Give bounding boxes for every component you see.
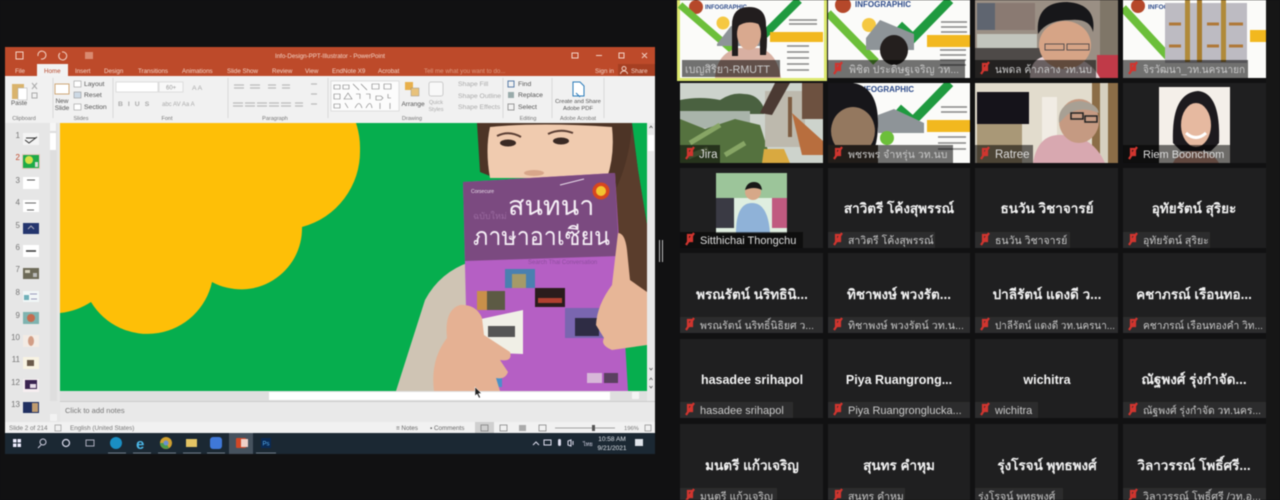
- participant tile: พิชิต: [827, 0, 971, 79]
- ribbon commands: Shape Fill: [458, 81, 489, 88]
- ribbon commands: [5, 76, 655, 123]
- name label: [680, 145, 720, 163]
- ribbon commands: Layout: [84, 81, 105, 88]
- name label: [828, 488, 905, 500]
- icon: task view: [86, 440, 94, 446]
- system tray: ไทย: [582, 441, 593, 448]
- slide heading: INFOGRAPHIC: [858, 85, 914, 94]
- purple book: [463, 173, 628, 391]
- big name: hasadee srihapol: [701, 373, 803, 387]
- name label: เบญสิริยา-RMUTT: [685, 64, 770, 76]
- big name: Piya Ruangrong...: [846, 373, 952, 387]
- name label: [1123, 317, 1266, 333]
- name label: ธนวัน วิชาจารย์: [995, 234, 1067, 247]
- graduation gowns: [1165, 0, 1247, 63]
- status bar: Slide 2 of 214: [9, 425, 48, 432]
- ribbon tabs: Tell me what you want to do...: [424, 68, 506, 75]
- purple book: ฉบับใหม่: [473, 211, 507, 221]
- name label: ณัฐพงศ์ รุ่งกำจัด วท.นคร...: [1143, 404, 1261, 417]
- participant tile: สุนทร: [828, 424, 970, 500]
- slide thumbnail panel: 3: [16, 176, 21, 185]
- title bar: Info-Design-PPT-Illustrator - PowerPoint: [275, 53, 385, 60]
- name label: [680, 232, 803, 248]
- participant tile: hasadee: [680, 339, 823, 418]
- participant tile: อุทัยรัตน์: [1123, 168, 1266, 248]
- purple book: Corsecure: [471, 189, 494, 195]
- icon: chrome: [160, 437, 172, 449]
- icon: windows logo: [13, 439, 21, 447]
- name label: Piya Ruangronglucka...: [848, 405, 962, 417]
- name label: Ratree: [995, 149, 1030, 161]
- name label: [975, 317, 1118, 333]
- icon: search: [38, 439, 46, 448]
- status bar: English (United States): [70, 425, 134, 432]
- participant tile: Riem Boonchom: [1123, 83, 1266, 164]
- system tray: 10:58 AM: [598, 436, 626, 443]
- icon: powerpoint: [229, 433, 253, 454]
- name label: คชาภรณ์ เรือนทองคำ วิท...: [1143, 319, 1263, 332]
- ribbon commands: Editing: [520, 116, 536, 122]
- name label: [828, 317, 970, 333]
- name label: [828, 402, 970, 418]
- ribbon tabs: Acrobat: [378, 68, 400, 75]
- status bar: 196%: [624, 426, 639, 432]
- ribbon commands: Arrange: [401, 101, 425, 108]
- big name: รุ่งโรจน์ พุทธพงศ์: [997, 456, 1097, 474]
- ribbon tabs: [5, 64, 655, 76]
- name label: Jira: [699, 149, 718, 161]
- ribbon tabs: Animations: [182, 68, 213, 75]
- name label: Sitthichai Thongchu: [700, 235, 796, 247]
- big name: มนตรี แก้วเจริญ: [705, 458, 799, 474]
- woman holding book: [396, 123, 647, 391]
- mouse cursor: [475, 387, 482, 398]
- ribbon commands: Slides: [74, 116, 89, 122]
- icon: zoom: [210, 437, 222, 449]
- icon: cortana: [62, 440, 70, 446]
- windows taskbar: [5, 433, 655, 454]
- ribbon commands: Find: [518, 81, 531, 88]
- participant tile: speaker: [676, 0, 828, 82]
- ribbon commands: New: [55, 98, 69, 105]
- big name: ปาลีรัตน์ แดงดี ว...: [993, 286, 1101, 302]
- participant tile: สาวิตรี: [828, 168, 970, 248]
- ribbon commands: A A: [192, 85, 203, 92]
- system tray: [533, 436, 643, 452]
- icon: internet explorer: e: [136, 436, 144, 453]
- slide thumbnail panel: 13: [11, 400, 21, 409]
- big name: คชาภรณ์ เรือนทอ...: [1136, 286, 1252, 302]
- big name: พรณรัตน์ นริทธินิ...: [696, 286, 808, 302]
- name label: [1123, 402, 1266, 418]
- ribbon commands: Section: [84, 104, 107, 111]
- participant tile: มนตรี: [680, 424, 823, 500]
- title bar: [5, 47, 655, 64]
- ribbon commands: Reset: [84, 92, 102, 99]
- name label: hasadee srihapol: [700, 405, 784, 417]
- slide thumbnail panel: 7: [16, 265, 21, 274]
- status bar: ▪ Comments: [430, 425, 464, 432]
- name label: ปาลีรัตน์ แดงดี วท.นครนา...: [995, 319, 1115, 332]
- panel: shared PowerPoint window: [5, 47, 655, 454]
- horizontal scrollbar: [60, 391, 647, 401]
- profile photo: [716, 173, 787, 233]
- name label: [975, 145, 1033, 163]
- name label: [680, 488, 777, 500]
- ribbon tabs: Slide Show: [227, 68, 258, 75]
- status bar: ≡ Notes: [396, 425, 418, 432]
- name label: [1123, 60, 1248, 78]
- participant tile: พชรพร: [828, 82, 971, 164]
- big name: ธนวัน วิชาจารย์: [1000, 200, 1094, 216]
- name label: [1123, 145, 1230, 163]
- ribbon commands: Adobe PDF: [563, 106, 593, 112]
- hands: [433, 305, 511, 391]
- older woman with glasses: [1033, 99, 1105, 163]
- slide thumbnail panel: 10: [11, 333, 21, 342]
- slide thumbnail panel: 6: [16, 243, 21, 252]
- ribbon commands: Shape Effects: [458, 104, 501, 111]
- name label: [975, 60, 1096, 78]
- status bar: [5, 422, 655, 433]
- participant tile: รุ่งโรจน์: [975, 424, 1118, 500]
- icon: photoshop: Ps: [262, 442, 270, 448]
- ribbon commands: Clipboard: [12, 116, 36, 122]
- big name: สาวิตรี โค้งสุพรรณ์: [844, 199, 955, 217]
- participant tile: คชาภรณ์: [1123, 253, 1266, 333]
- participant tile: ณัฐพงศ์: [1123, 339, 1266, 418]
- ribbon commands: Drawing: [402, 116, 422, 122]
- participant tile: ทิชาพงษ์: [828, 253, 970, 333]
- ribbon tabs: EndNote X9: [332, 68, 366, 75]
- woman presenter: [715, 7, 781, 78]
- name label: [1123, 488, 1266, 500]
- green slide background: [60, 123, 647, 391]
- name label: [828, 232, 935, 248]
- woman close-up: [828, 83, 878, 163]
- right edge scrollbar: [647, 123, 655, 401]
- slide thumbnail panel: 12: [11, 378, 21, 387]
- name label: [1123, 232, 1210, 248]
- ribbon tabs: Transitions: [138, 68, 168, 75]
- participant tile: นพดล: [974, 0, 1119, 79]
- slide thumbnail panel: 9: [16, 311, 21, 320]
- participant tile: Ratree: [974, 82, 1119, 164]
- slide thumbnail panel: 1: [16, 131, 21, 140]
- ribbon commands: Styles: [429, 107, 444, 113]
- ribbon commands: BIUS: [118, 101, 154, 108]
- name label: พชรพร จำหรุ่น วท.นบ: [848, 149, 947, 161]
- name label: [680, 317, 823, 333]
- participant tile: Sitthichai: [680, 168, 823, 248]
- yellow scalloped shape: [60, 123, 360, 334]
- icon: photoshop: [261, 438, 271, 448]
- participant tile: พรณรัตน์: [680, 253, 823, 333]
- participant tile: ปาลีรัตน์: [975, 253, 1118, 333]
- ribbon tabs: Share: [631, 68, 648, 75]
- icon: edge: [110, 437, 122, 449]
- big name: ณัฐพงศ์ รุ่งกำจัด...: [1141, 371, 1247, 389]
- participant tile: วิลาวรรณ์: [1123, 424, 1266, 500]
- system tray: 9/21/2021: [598, 445, 627, 452]
- name label: Riem Boonchom: [1143, 149, 1224, 161]
- ribbon commands: Paragraph: [262, 116, 288, 122]
- ribbon commands: Paste: [11, 100, 28, 107]
- name label: ทิชาพงษ์ พวงรัตน์ วท.น...: [848, 319, 964, 332]
- slide heading: INFOGRAPHIC: [1148, 4, 1194, 11]
- gallery divider handle: [660, 240, 662, 262]
- participant tile: wichitra: [975, 339, 1118, 418]
- big name: วิลาวรรณ์ โพธิ์ศรี...: [1137, 455, 1251, 473]
- slide thumbnail panel: 8: [16, 288, 21, 297]
- notes pane: [60, 401, 655, 422]
- name label: พรณรัตน์ นริทธิ์นิธิยศ ว...: [700, 317, 814, 332]
- slide thumbnail panel: 5: [16, 221, 21, 230]
- name label: [975, 402, 1038, 418]
- name label: [828, 145, 953, 163]
- ribbon commands: 60+: [166, 86, 177, 92]
- slide canvas: [59, 122, 648, 392]
- ribbon commands: Replace: [518, 92, 543, 99]
- book subtitle: ภาษาอาเซียน: [473, 223, 610, 251]
- big name: อุทัยรัตน์ สุริยะ: [1152, 200, 1236, 217]
- ribbon tabs: View: [305, 68, 319, 75]
- ribbon commands: Font: [161, 116, 173, 122]
- ribbon commands: Slide: [55, 105, 70, 112]
- ribbon tabs: Sign in: [595, 68, 614, 75]
- slide thumbnail panel: 2: [16, 153, 21, 162]
- slide heading: INFOGRAPHIC: [705, 5, 748, 11]
- name label: พิชิต ประดิษฐเจริญ วท...: [849, 64, 959, 76]
- ribbon commands: Select: [518, 104, 537, 111]
- barcode sticker: [467, 310, 523, 354]
- ribbon commands: Adobe Acrobat: [560, 116, 597, 122]
- ribbon commands: Quick: [429, 100, 443, 106]
- ribbon tabs: Insert: [75, 68, 91, 75]
- name label: อุทัยรัตน์ สุริยะ: [1143, 234, 1209, 247]
- name label: wichitra: [994, 405, 1033, 417]
- participant tile: Piya: [828, 339, 970, 418]
- slide thumbnail panel: 11: [12, 355, 21, 364]
- ribbon tabs: Design: [104, 68, 124, 75]
- name label: จิรวัฒนา_วท.นครนายก: [1143, 64, 1245, 76]
- big name: ทิชาพงษ์ พวงรัต...: [847, 286, 951, 302]
- purple book: Search Thai Conversation: [528, 260, 597, 266]
- ribbon tabs: File: [15, 68, 26, 75]
- ribbon tabs: Review: [272, 68, 293, 75]
- big name: สุนทร คำหุม: [863, 458, 935, 474]
- ribbon commands: Shape Outline: [458, 93, 501, 100]
- icon: file explorer: [186, 439, 197, 447]
- participant tile: จิรวัฒนา: [1122, 0, 1267, 79]
- ribbon commands: abc AV Aa A: [162, 102, 195, 108]
- notes pane: Click to add notes: [65, 406, 125, 415]
- name label: [975, 488, 1063, 500]
- ribbon tabs: Home: [44, 68, 61, 75]
- ribbon commands: Create and Share: [555, 99, 601, 105]
- name label: [975, 232, 1070, 248]
- book title: สนทนา: [508, 191, 594, 221]
- name label: สาวิตรี โค้งสุพรรณ์: [848, 234, 934, 247]
- big name: wichitra: [1022, 373, 1072, 387]
- paste icon: [12, 84, 27, 100]
- participant tile: Jira: [679, 82, 824, 164]
- icon: Adobe PDF: [573, 82, 584, 97]
- name label: นพดล ค้าภลาง วท.นบ: [995, 64, 1092, 76]
- profile photo: [1159, 87, 1230, 163]
- slide heading: INFOGRAPHIC: [855, 0, 911, 9]
- name label: [680, 402, 793, 418]
- participant tile: ธนวัน: [975, 168, 1118, 248]
- name label: [682, 60, 780, 77]
- slide thumbnail panel: 4: [16, 198, 21, 207]
- slide thumbnail panel: [5, 123, 60, 421]
- man with glasses: [1038, 2, 1093, 69]
- name label: [828, 60, 965, 78]
